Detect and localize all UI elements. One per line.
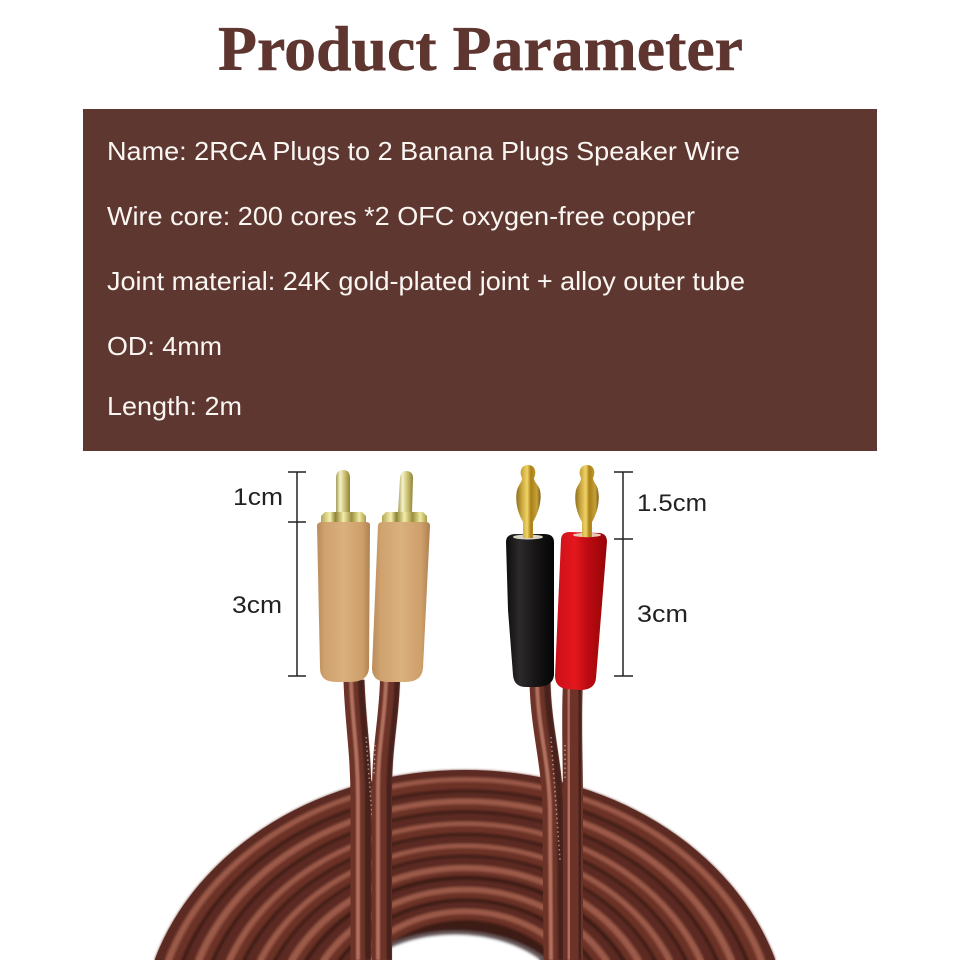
label: 1.5cm: 1.5cm <box>637 490 707 517</box>
spec: name: Name: 2RCA Plugs to 2 Banana Plugs Speaker Wire <box>107 136 740 166</box>
RCA plug left <box>317 470 370 682</box>
wire: left RCA 2 <box>374 680 397 960</box>
alloy body <box>372 522 430 682</box>
sleeve opening <box>513 534 543 540</box>
cable wires <box>351 680 580 960</box>
label: 3cm left: 3cm <box>232 592 282 619</box>
spec: wire core: Wire core: 200 cores *2 OFC oxygen-free copper <box>107 201 695 231</box>
gold pin <box>336 470 350 513</box>
spec: outer diameter: OD: 4mm <box>107 331 222 361</box>
dimension: banana lengths <box>614 472 633 676</box>
collar <box>382 512 427 524</box>
title: Product Parameter <box>218 13 743 84</box>
cable coil <box>155 770 775 960</box>
gold pin <box>516 465 541 538</box>
alloy body <box>317 522 370 682</box>
wire: banana black <box>537 682 561 960</box>
label: 1cm: 1cm <box>233 484 283 511</box>
panel: product specifications <box>83 109 877 451</box>
RCA plug right <box>372 471 430 682</box>
black sleeve <box>506 534 554 687</box>
wire: banana red <box>565 682 580 960</box>
wire: left RCA 1 <box>351 680 372 960</box>
banana plug red <box>555 465 607 690</box>
spec: length: Length: 2m <box>107 391 242 421</box>
collar <box>321 512 366 524</box>
spec: joint material: Joint material: 24K gold-plated joint + alloy outer tube <box>107 266 745 296</box>
gold pin <box>575 465 599 537</box>
gold pin <box>398 471 413 513</box>
dimension: RCA lengths <box>288 472 306 676</box>
red sleeve <box>555 532 607 690</box>
banana plug black <box>506 465 554 687</box>
sleeve opening <box>573 533 601 537</box>
label: 3cm right: 3cm <box>637 601 688 628</box>
